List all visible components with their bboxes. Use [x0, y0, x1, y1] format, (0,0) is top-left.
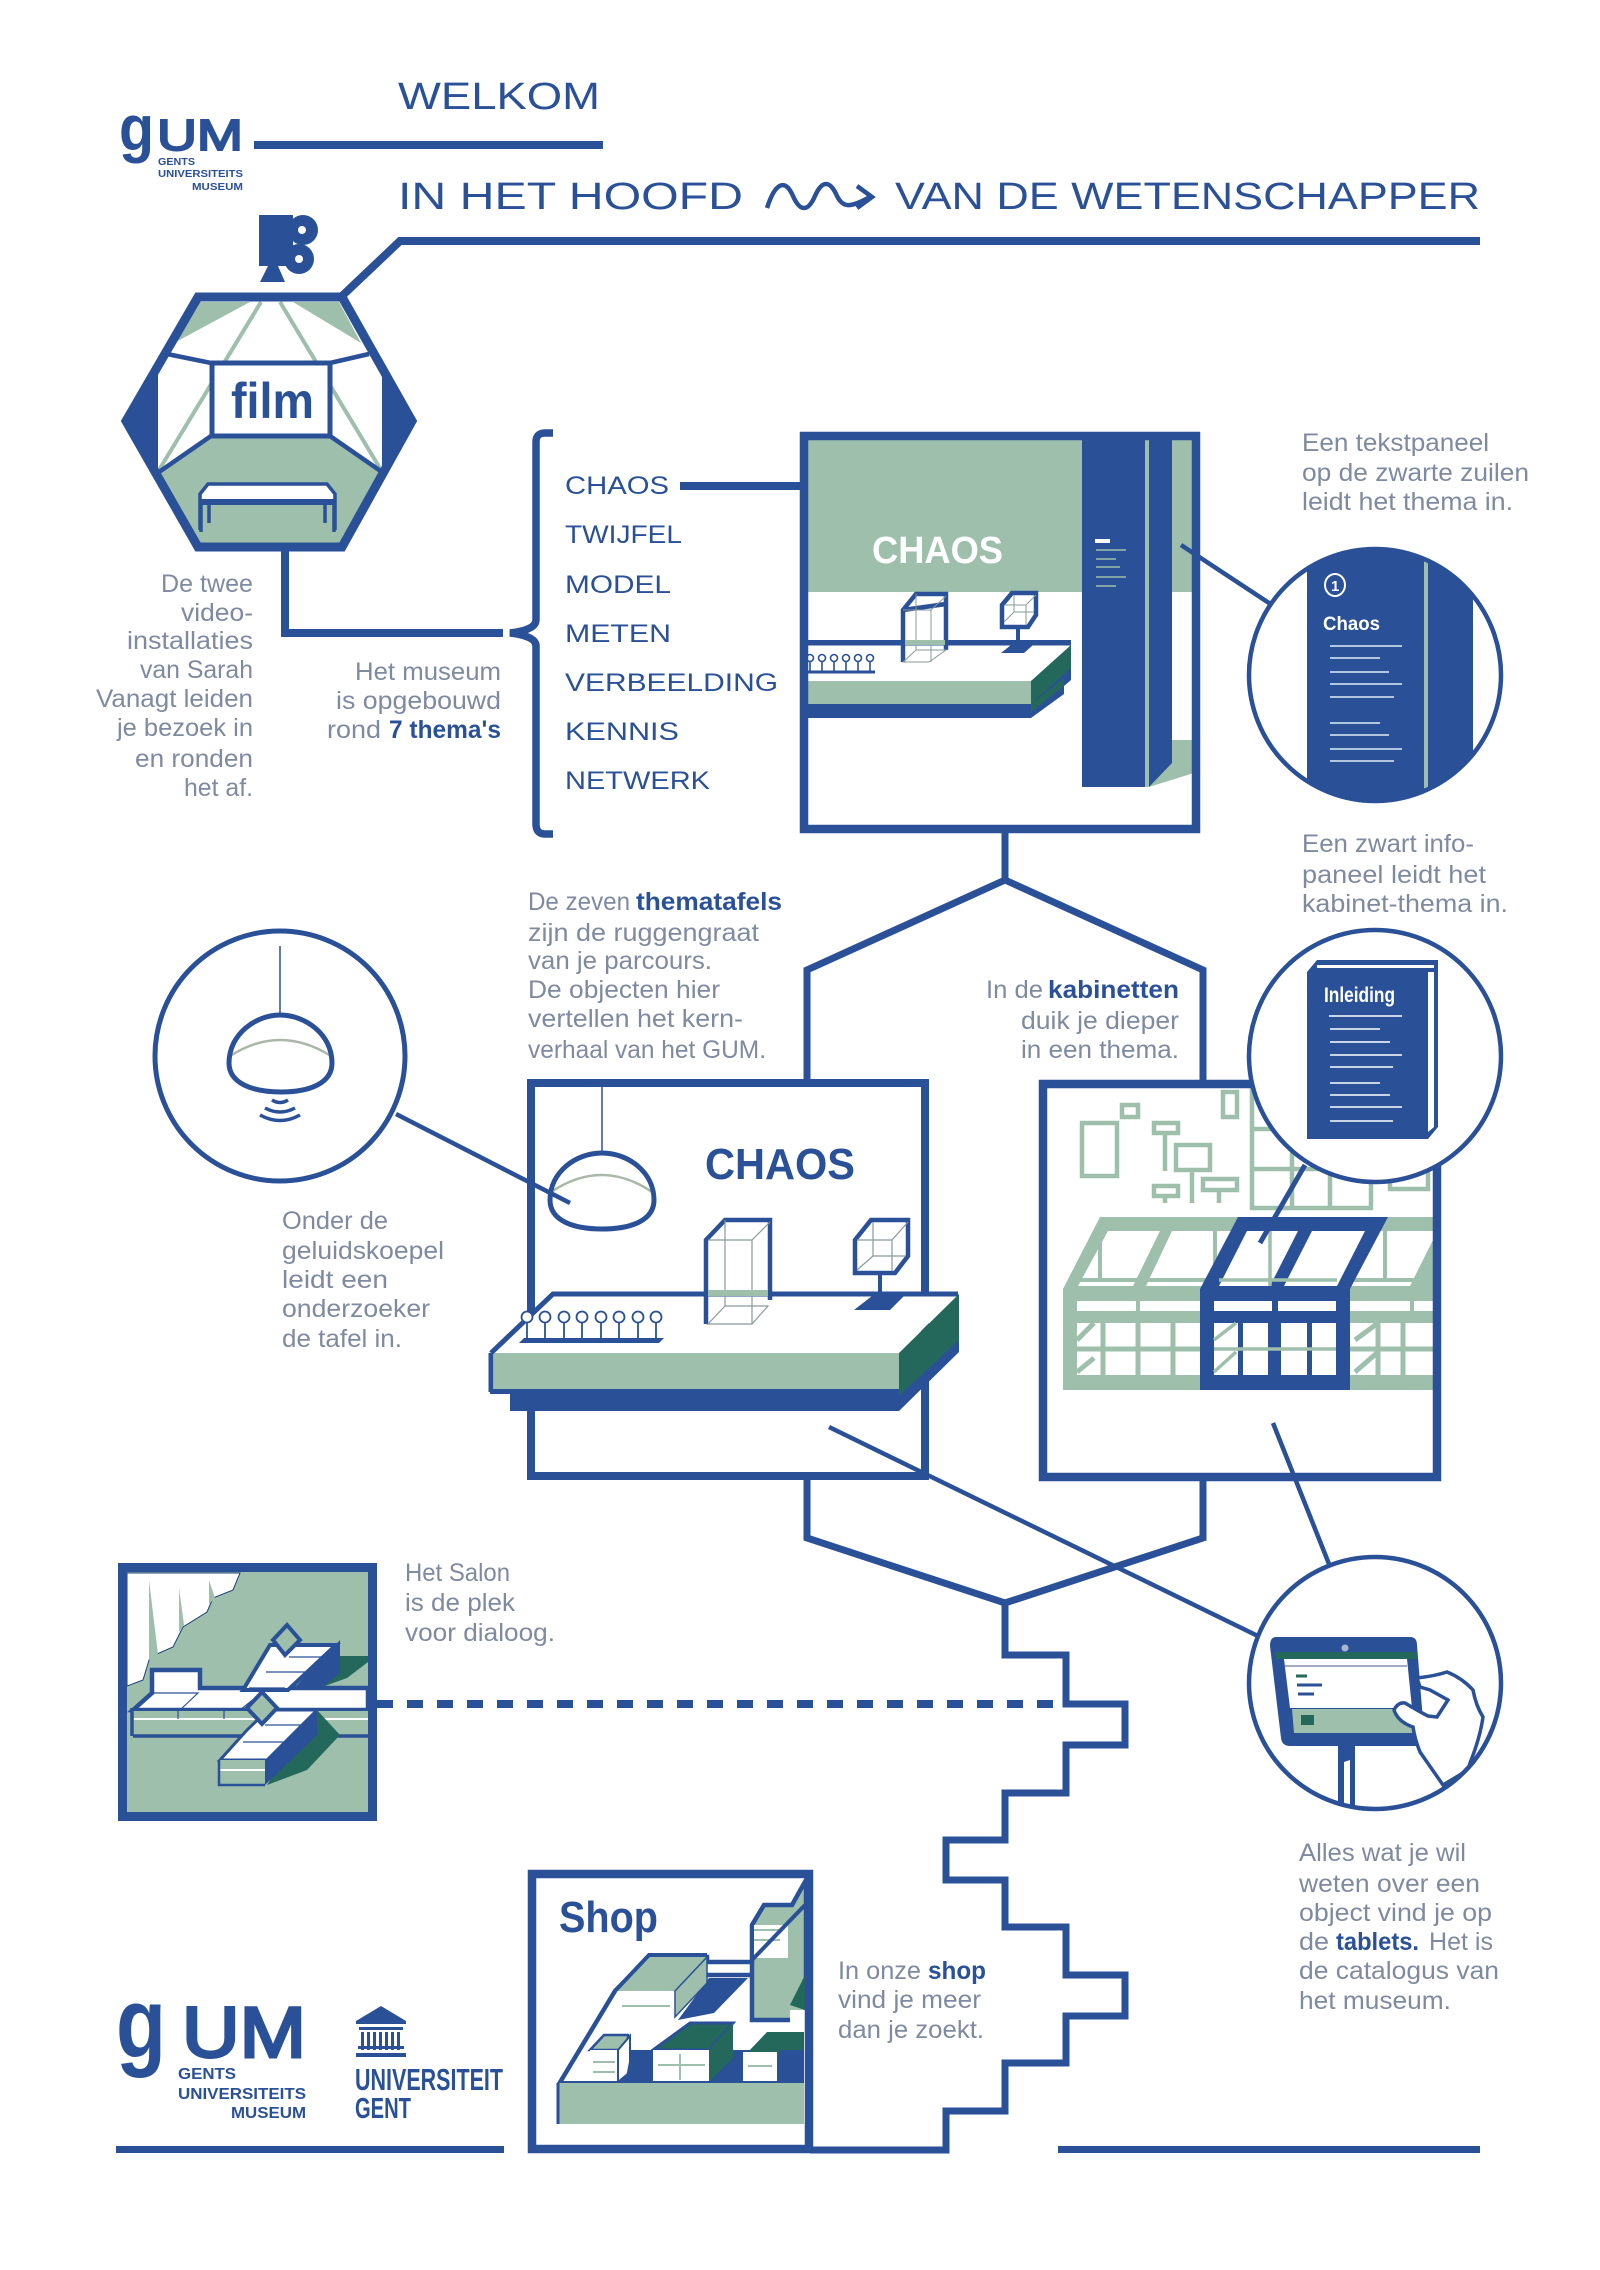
- text: tekstpaneel: op de zwarte zuilen: [1302, 459, 1529, 487]
- table: [490, 1294, 959, 1411]
- panel: salon: [122, 1567, 373, 1817]
- circle: text panel detail: [1249, 545, 1501, 807]
- list: seven themes: KENNIS: [565, 718, 679, 746]
- text: tekstpaneel: Een tekstpaneel: [1302, 429, 1489, 457]
- icon: film camera: [259, 215, 318, 282]
- connector: sound dome to circle: [396, 1114, 570, 1203]
- table: [808, 640, 1071, 718]
- big box: [615, 1955, 748, 2025]
- text: geluidskoepel: onderzoeker: [282, 1295, 430, 1323]
- text: tablets: object vind je op: [1299, 1899, 1492, 1927]
- text: shop: dan je zoekt.: [838, 2016, 984, 2044]
- title: in het hoofd van de wetenschapper: IN HET HOOFD: [398, 176, 743, 218]
- text: kabinetten: kabinetten: [1048, 976, 1179, 1004]
- text: salon: Het Salon: [405, 1559, 510, 1587]
- bench: [200, 484, 335, 532]
- circle: sound dome detail: [155, 931, 405, 1181]
- text: 7 thema's: 7 thema's: [389, 716, 501, 744]
- text: 7 thema's: rond: [327, 716, 381, 744]
- text: tekstpaneel: [1302, 429, 1529, 516]
- text: geluidskoepel: leidt een: [282, 1266, 388, 1294]
- display case tall: [903, 594, 946, 662]
- text: salon: [405, 1559, 555, 1647]
- logo: GUM top: g: [119, 92, 154, 164]
- text: geluidskoepel: [282, 1207, 444, 1353]
- logo: Universiteit Gent: [355, 2006, 503, 2125]
- tablet body: [1270, 1637, 1425, 1746]
- connector: salon dashed line: [377, 1700, 1066, 1708]
- tall box: [750, 1878, 805, 2022]
- icon: building: [356, 2006, 406, 2057]
- logo: Universiteit Gent: UNIVERSITEIT: [355, 2062, 503, 2097]
- text: info-paneel: paneel leidt het: [1302, 861, 1486, 889]
- circle: info panel book: [1249, 930, 1501, 1182]
- text: thematafels: De zeven: [528, 888, 630, 916]
- text: kabinetten: in een thema.: [1021, 1036, 1179, 1064]
- logo: GUM bottom: UM: [182, 1994, 306, 2073]
- label: chaos: CHAOS: [872, 530, 1003, 572]
- dark box row: [620, 2023, 804, 2083]
- text: video installaties: je bezoek in: [116, 714, 253, 742]
- logo: GUM bottom: g: [116, 1967, 166, 2078]
- connector: film room to themes: [285, 550, 503, 633]
- shop heading: Shop: [559, 1893, 658, 1942]
- logo: Universiteit Gent: GENT: [355, 2093, 411, 2125]
- panel: chaos room: [804, 436, 1196, 829]
- text: thematafels: van je parcours.: [528, 947, 712, 975]
- list: seven themes: METEN: [565, 620, 671, 648]
- display case small: [854, 1220, 908, 1310]
- icon: squiggle arrow: [767, 184, 872, 208]
- text: video installaties: van Sarah: [140, 656, 253, 684]
- text: geluidskoepel: Onder de: [282, 1207, 388, 1235]
- logo: GUM bottom: MUSEUM: [231, 2105, 306, 2122]
- text: geluidskoepel: de tafel in.: [282, 1325, 402, 1353]
- display case tall: [706, 1220, 770, 1324]
- text: shop: [838, 1957, 986, 2044]
- tablet stand: [1338, 1744, 1355, 1810]
- bench long: [132, 1670, 368, 1736]
- bench diagonal lower: [219, 1692, 340, 1785]
- bracket: themes: [510, 433, 553, 834]
- text: thematafels: De objecten hier: [528, 976, 720, 1004]
- connector: chaos to panel: [680, 482, 802, 490]
- title: in het hoofd van de wetenschapper: [398, 176, 1480, 218]
- logo: GUM bottom: [116, 1967, 306, 2122]
- text: tablets: de: [1299, 1928, 1329, 1956]
- badge: [1325, 574, 1345, 596]
- text: tablets: het museum.: [1299, 1987, 1451, 2015]
- connector: path to stairs: [807, 1478, 1203, 2150]
- list: seven themes: MODEL: [565, 571, 671, 599]
- text: shop: vind je meer: [838, 1986, 981, 2014]
- text: tablets: Het is: [1429, 1928, 1493, 1956]
- shelf outline: [559, 1957, 750, 2084]
- list: seven themes: TWIJFEL: [565, 521, 682, 549]
- connector: column to circle: [1181, 545, 1272, 605]
- text: shop: shop: [928, 1957, 986, 1985]
- badge: 1: [1331, 578, 1339, 595]
- logo: GUM top: [119, 92, 243, 193]
- small box: [587, 2033, 631, 2081]
- bench diagonal upper: [243, 1625, 368, 1690]
- text: salon: voor dialoog.: [405, 1619, 555, 1647]
- text: tablets: Alles wat je wil: [1299, 1839, 1466, 1867]
- text: tablets: [1298, 1839, 1499, 2015]
- text: info-paneel: kabinet-thema in.: [1302, 890, 1508, 918]
- text: 7 thema's: is opgebouwd: [336, 687, 501, 715]
- panel heading: Chaos: [1323, 614, 1380, 635]
- panel: film room hexagon: [121, 297, 417, 548]
- text: thematafels: verhaal van het GUM.: [528, 1036, 766, 1064]
- panel: thematafel: [490, 1083, 959, 1476]
- text: video installaties: Vanagt leiden: [96, 685, 253, 713]
- display case small: [1001, 593, 1036, 653]
- text: tekstpaneel: leidt het thema in.: [1302, 488, 1513, 516]
- text: shop: In onze: [838, 1957, 921, 1985]
- text: 7 thema's: [327, 658, 501, 744]
- text: thematafels: zijn de ruggengraat: [528, 919, 759, 947]
- text: salon: is de plek: [405, 1589, 516, 1617]
- film screen: [212, 363, 330, 436]
- film screen: film: [231, 373, 314, 429]
- list: seven themes: CHAOS: [565, 472, 669, 500]
- list: seven themes: VERBEELDING: [565, 669, 778, 697]
- connector: film room to title line: [342, 241, 1480, 296]
- logo: GUM top: MUSEUM: [192, 181, 243, 193]
- text: thematafels: [528, 888, 782, 1064]
- text: video installaties: [96, 570, 253, 802]
- logo: GUM top: UM: [157, 111, 243, 160]
- title: in het hoofd van de wetenschapper: VAN DE WETENSCHAPPER: [895, 176, 1480, 218]
- curtain: [127, 1573, 240, 1686]
- text: video installaties: video-: [181, 599, 253, 627]
- panel: shop: [532, 1874, 809, 2149]
- shelf base: [559, 2083, 804, 2124]
- circle: tablet: [1249, 1557, 1501, 1810]
- book: [1307, 960, 1438, 1139]
- pins: [806, 654, 875, 672]
- pins: [519, 1312, 664, 1343]
- text: info-paneel: Een zwart info-: [1302, 830, 1474, 858]
- column: [1082, 439, 1172, 787]
- connector: path hexagon top: [807, 833, 1203, 1082]
- text: kabinetten: [986, 976, 1179, 1064]
- text: thematafels: thematafels: [636, 888, 782, 916]
- list: seven themes: NETWERK: [565, 767, 710, 795]
- text: tablets: de catalogus van: [1299, 1957, 1499, 1985]
- text: video installaties: installaties: [127, 627, 253, 655]
- connector: cabinet to book circle: [1260, 1165, 1305, 1243]
- text: kabinetten: duik je dieper: [1021, 1007, 1179, 1035]
- text: thematafels: vertellen het kern-: [528, 1005, 743, 1033]
- title rule: [254, 141, 603, 149]
- connector: cabinet to tablet: [1273, 1423, 1329, 1564]
- vitrine blue: [1200, 1217, 1388, 1390]
- wall frames: [1082, 1088, 1428, 1208]
- text: video installaties: en ronden: [135, 745, 253, 773]
- text: kabinetten: In de: [986, 976, 1043, 1004]
- panel: kabinet: [1043, 1084, 1440, 1477]
- connector: table to tablet: [829, 1427, 1262, 1638]
- footer rule right: [1058, 2146, 1480, 2153]
- text: tablets: tablets.: [1336, 1928, 1419, 1956]
- label: chaos: CHAOS: [705, 1140, 855, 1189]
- logo: GUM top: UNIVERSITEITS: [158, 168, 243, 180]
- logo: GUM top: GENTS: [158, 156, 195, 168]
- footer rule left: [116, 2146, 504, 2153]
- list: seven themes: [565, 472, 778, 795]
- text: info-paneel: [1302, 830, 1508, 918]
- text: video installaties: De twee: [161, 570, 253, 598]
- sound dome: [550, 1087, 654, 1229]
- text: geluidskoepel: geluidskoepel: [282, 1237, 444, 1265]
- title: welkom: WELKOM: [398, 76, 600, 118]
- hand: [1394, 1672, 1483, 1785]
- logo: GUM bottom: GENTS: [178, 2066, 236, 2083]
- text: video installaties: het af.: [184, 774, 253, 802]
- logo: GUM bottom: UNIVERSITEITS: [178, 2086, 306, 2103]
- text: 7 thema's: Het museum: [355, 658, 501, 686]
- text: tablets: weten over een: [1298, 1870, 1480, 1898]
- vitrines green: [1063, 1217, 1440, 1390]
- book: Inleiding: [1324, 984, 1395, 1007]
